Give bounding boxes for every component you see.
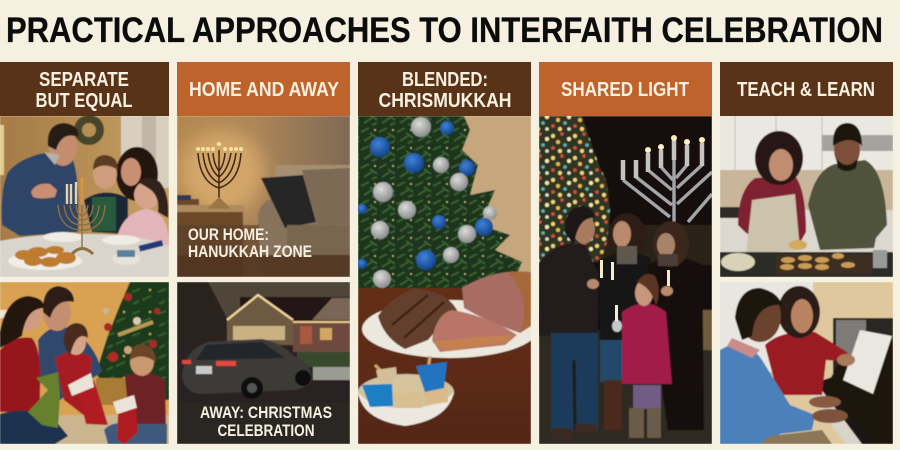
caption: away: AWAY: CHRISTMAS <box>200 404 332 422</box>
icon: menorah <box>58 177 105 254</box>
panel: teach and learn <box>720 62 893 444</box>
ham on plate <box>362 271 538 358</box>
illustration: tree, ham and dreidels <box>357 116 538 444</box>
panel: blended chrismukkah <box>357 62 538 444</box>
blue and silver ornaments <box>357 117 497 288</box>
caption: our home: HANUKKAH ZONE <box>188 243 312 261</box>
illustration: home with menorah and sofa <box>177 116 350 277</box>
header: blended chrismukkah <box>358 62 531 116</box>
header: separate but equal <box>0 62 169 116</box>
icon: menorah on table <box>196 142 243 208</box>
illustration: family with christmas stockings <box>0 282 169 444</box>
panel: separate but equal <box>0 62 169 444</box>
header: home and away <box>177 62 350 116</box>
bowl of dreidels <box>358 356 454 426</box>
caption: away <box>200 406 332 436</box>
header: shared light: SHARED LIGHT <box>561 79 689 101</box>
header: blended chrismukkah: BLENDED: <box>402 69 488 91</box>
icon: large outdoor menorah <box>623 135 712 222</box>
header: teach and learn <box>720 62 893 116</box>
candles <box>600 260 670 321</box>
header: separate but equal: SEPARATE <box>39 69 129 91</box>
header: home and away: HOME AND AWAY <box>189 79 340 101</box>
header: shared light <box>539 62 712 116</box>
header: teach and learn: TEACH & LEARN <box>737 79 875 101</box>
illustration: community menorah lighting <box>539 116 712 444</box>
illustration: family lighting menorah <box>0 116 169 277</box>
caption: our home <box>188 228 312 257</box>
header: separate but equal: BUT EQUAL <box>36 90 132 112</box>
people holding candles <box>539 206 704 440</box>
panel: home and away <box>177 62 350 444</box>
illustration: couple at piano <box>720 282 893 444</box>
illustration: car leaving decorated house <box>177 282 350 444</box>
illustration: couple cooking <box>720 116 893 277</box>
caption: away: CELEBRATION <box>218 422 314 440</box>
panel: shared light <box>539 62 712 444</box>
caption: our home: OUR HOME: <box>188 226 269 244</box>
header: blended chrismukkah: CHRISMUKKAH <box>378 90 512 112</box>
